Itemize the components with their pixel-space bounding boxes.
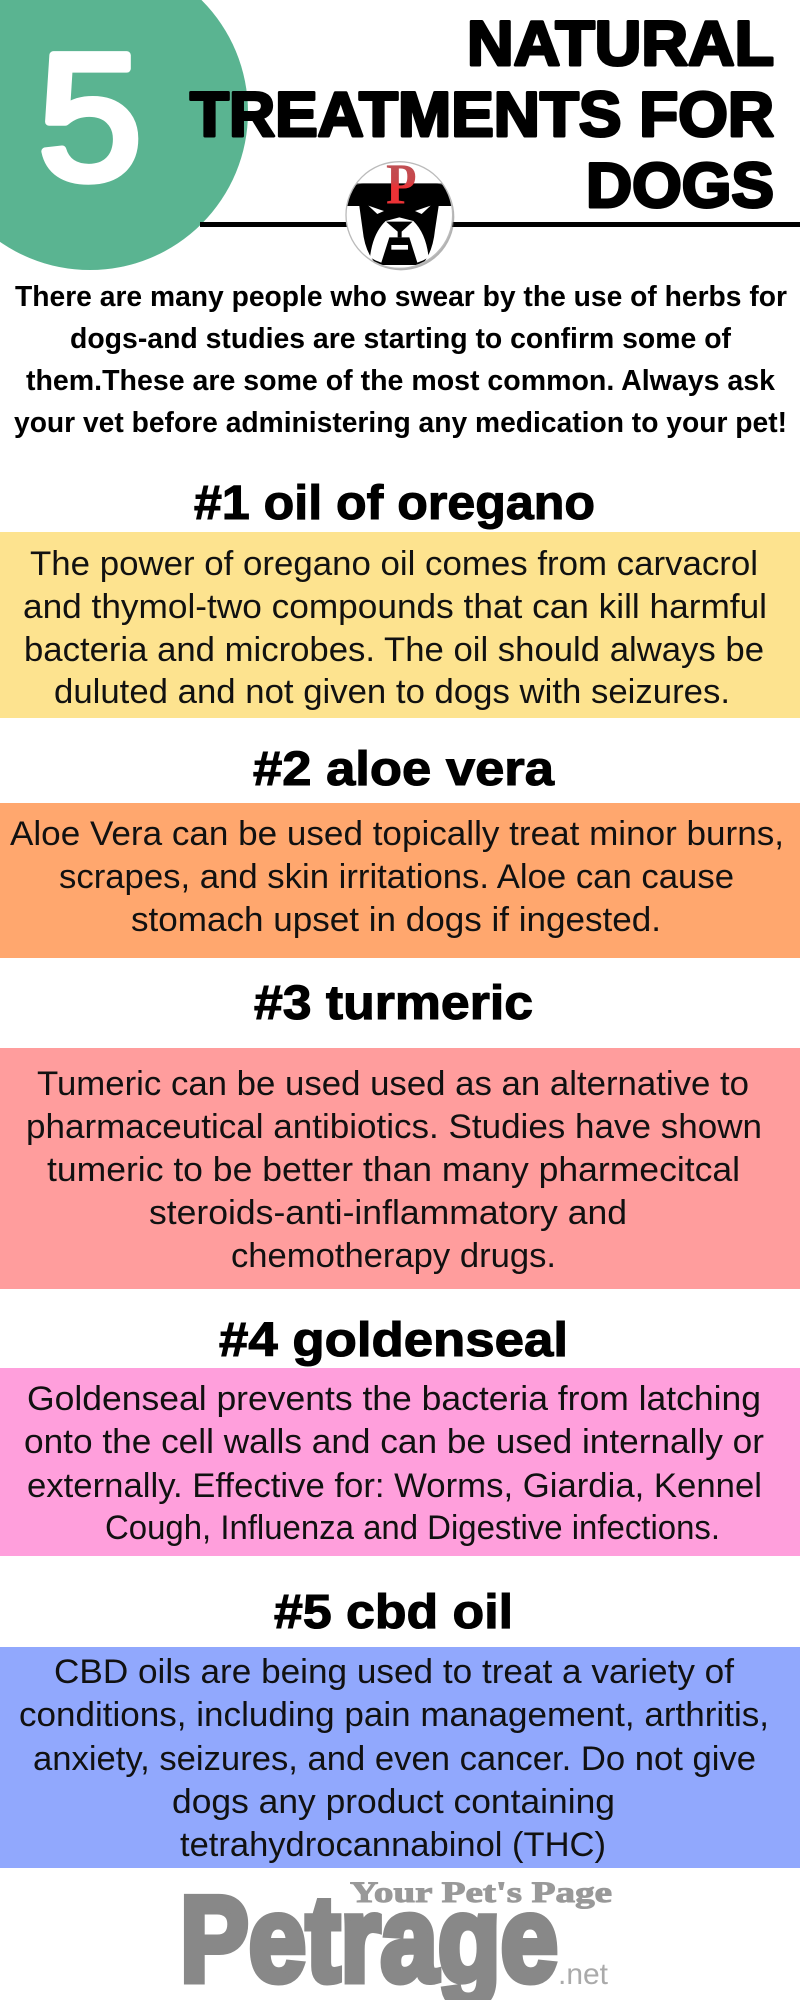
body text: duluted and not given to dogs with seizures. [54, 673, 730, 711]
body text: bacteria and microbes. The oil should always be [24, 631, 764, 669]
tagline: Your Pet's Page [350, 1876, 612, 1909]
body text: chemotherapy drugs. [231, 1237, 556, 1275]
panel: oil of oregano [0, 477, 800, 718]
intro text [14, 281, 787, 439]
heading: #5 cbd oil [274, 1586, 513, 1639]
body text: tetrahydrocannabinol (THC) [180, 1826, 606, 1864]
body text: CBD oils are being used to treat a variety of [54, 1653, 734, 1691]
body text: tumeric to be better than many pharmecitcal [47, 1151, 740, 1189]
intro text: There are many people who swear by the use of herbs for [15, 281, 787, 313]
band [0, 1647, 800, 1868]
heading: #3 turmeric [254, 977, 533, 1030]
body text: Tumeric can be used used as an alternative to [37, 1065, 749, 1103]
intro text: your vet before administering any medication to your pet! [14, 407, 787, 439]
heading: #2 aloe vera [253, 743, 554, 796]
panel: cbd oil [0, 1586, 800, 1868]
body text: dogs any product containing [172, 1783, 615, 1821]
body text: stomach upset in dogs if ingested. [131, 901, 661, 939]
title: DOGS [586, 151, 774, 221]
heading: #1 oil of oregano [194, 477, 595, 530]
icon: bulldog logo: P [386, 151, 417, 216]
body text: conditions, including pain management, arthritis, [19, 1696, 769, 1734]
intro text: dogs-and studies are starting to confirm some of [70, 323, 731, 355]
body text: Aloe Vera can be used topically treat minor burns, [10, 815, 784, 853]
body text: onto the cell walls and can be used internally or [24, 1423, 764, 1461]
panel: goldenseal [0, 1314, 800, 1556]
green circle badge [0, 0, 248, 270]
body text: The power of oregano oil comes from carvacrol [30, 545, 758, 583]
title: TREATMENTS FOR [190, 80, 774, 150]
body text: steroids-anti-inflammatory and [149, 1194, 627, 1232]
band [0, 1048, 800, 1289]
body text: Cough, Influenza and Digestive infections. [105, 1509, 720, 1547]
title [190, 9, 774, 221]
body text: Goldenseal prevents the bacteria from latching [27, 1380, 761, 1418]
body text: externally. Effective for: Worms, Giardia, Kennel [27, 1467, 762, 1505]
icon: bulldog logo [344, 151, 454, 270]
body text: pharmaceutical antibiotics. Studies have shown [26, 1108, 762, 1146]
header [0, 0, 800, 270]
panel: aloe vera [0, 743, 800, 958]
body text: anxiety, seizures, and even cancer. Do not give [33, 1740, 756, 1778]
header rule [200, 222, 800, 227]
band [0, 803, 800, 958]
intro text: them.These are some of the most common. Always ask [26, 365, 776, 397]
band [0, 1368, 800, 1556]
body text: and thymol-two compounds that can kill harmful [23, 588, 767, 626]
body text [10, 815, 784, 939]
title: NATURAL [467, 9, 774, 79]
body text [26, 1065, 762, 1275]
body text [24, 1380, 764, 1547]
heading: #4 goldenseal [219, 1314, 568, 1367]
body text [23, 545, 767, 711]
domain suffix: .net [558, 1958, 609, 1991]
body text: scrapes, and skin irritations. Aloe can cause [59, 858, 734, 896]
panel: turmeric [0, 977, 800, 1289]
body text [19, 1653, 769, 1864]
footer logo [180, 1871, 612, 2000]
band [0, 532, 800, 718]
numeral 5: 5 [38, 17, 142, 218]
